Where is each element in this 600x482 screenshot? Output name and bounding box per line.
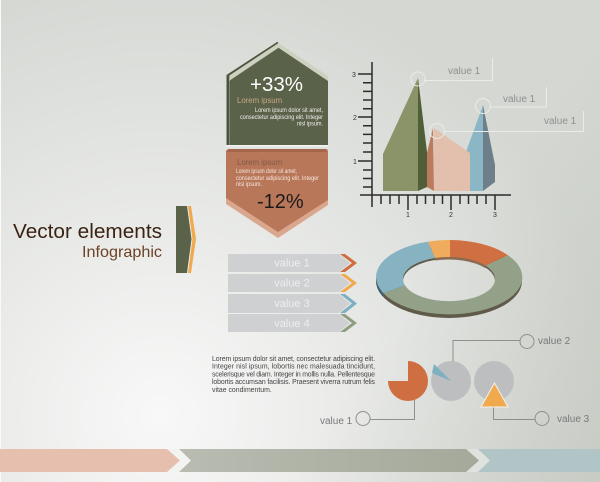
panel: plus 33 percent hexagon: Lorem ipsum	[237, 96, 282, 105]
text block: paragraph	[212, 356, 376, 394]
text block: paragraph: scelerisque vel diam. Integer in mollis nulla. Pellentesque	[212, 372, 375, 378]
bottom arrow band	[0, 449, 600, 472]
band: salmon	[0, 449, 180, 472]
title: Infographic	[82, 244, 162, 261]
panel: plus 33 percent hexagon: +33%	[250, 73, 303, 96]
icon: title arrow	[176, 206, 196, 273]
panel: minus 12 percent hexagon: consectetur adipiscing elit. Integer	[236, 176, 319, 182]
chart: peak chart: value 1	[448, 66, 481, 77]
row: value 4: value 4	[274, 318, 310, 330]
axis labels: 2	[353, 115, 357, 122]
peak: green	[383, 78, 427, 191]
panel: plus 33 percent hexagon: nisl ipsum.	[297, 122, 323, 128]
chart: donut	[376, 240, 522, 318]
axis labels: 2	[449, 212, 453, 219]
row: value 3: value 3	[274, 298, 310, 310]
peak: blue	[466, 105, 495, 191]
labels: value 1	[320, 416, 353, 427]
axis labels: 3	[352, 72, 356, 79]
peak: salmon	[427, 128, 470, 191]
chart: peak chart: value 1	[544, 116, 577, 127]
band: blue	[478, 449, 600, 472]
axis labels	[352, 72, 497, 219]
panel: minus 12 percent hexagon: Lorem ipsum dolor sit amet,	[236, 169, 297, 175]
segment: green	[383, 255, 522, 314]
chart: peak chart	[352, 58, 584, 219]
axis labels: 1	[406, 212, 410, 219]
panel: minus 12 percent hexagon: Lorem ipsum	[237, 158, 282, 167]
text block: paragraph: vitae condimentum.	[212, 387, 272, 394]
pie: gray with blue wedge	[431, 361, 471, 401]
panel: minus 12 percent hexagon: nisl ipsum.	[236, 182, 262, 188]
text block: paragraph: Integer nisl ipsum, lobortis nec malesuada tincidunt,	[212, 364, 375, 370]
chart: pie icons	[320, 334, 590, 427]
callouts	[411, 58, 584, 138]
panel: plus 33 percent hexagon	[226, 42, 328, 147]
panel: plus 33 percent hexagon: Lorem ipsum dolor sit amet,	[255, 108, 323, 114]
callout lines	[356, 334, 549, 426]
row: value 2: value 2	[274, 278, 310, 290]
row: value 1: value 1	[274, 258, 310, 270]
segment: blue	[376, 242, 435, 293]
axis labels: 3	[493, 212, 497, 219]
axis labels: 1	[353, 159, 357, 166]
band: green	[179, 449, 479, 472]
title: Vector elements	[13, 220, 162, 243]
panel: minus 12 percent hexagon: -12%	[257, 191, 304, 213]
segment: orange	[450, 240, 508, 266]
labels	[320, 336, 590, 427]
list: value rows	[228, 254, 357, 332]
labels: value 2	[538, 336, 571, 347]
segment: yellow	[428, 240, 450, 258]
labels: value 3	[557, 414, 590, 425]
title	[13, 220, 162, 261]
pie: gray with triangle	[474, 361, 514, 407]
panel: minus 12 percent hexagon	[226, 149, 328, 238]
chart: peak chart: value 1	[503, 94, 536, 105]
panel: plus 33 percent hexagon: consectetur adipiscing elit. Integer	[240, 115, 323, 121]
text block: paragraph: lobortis accumsan facilisis. Praesent viverra rutrum felis	[212, 379, 376, 386]
pie: orange	[388, 361, 428, 401]
axes	[358, 62, 511, 210]
text block: paragraph: Lorem ipsum dolor sit amet, consectetur adipiscing elit.	[212, 356, 375, 363]
